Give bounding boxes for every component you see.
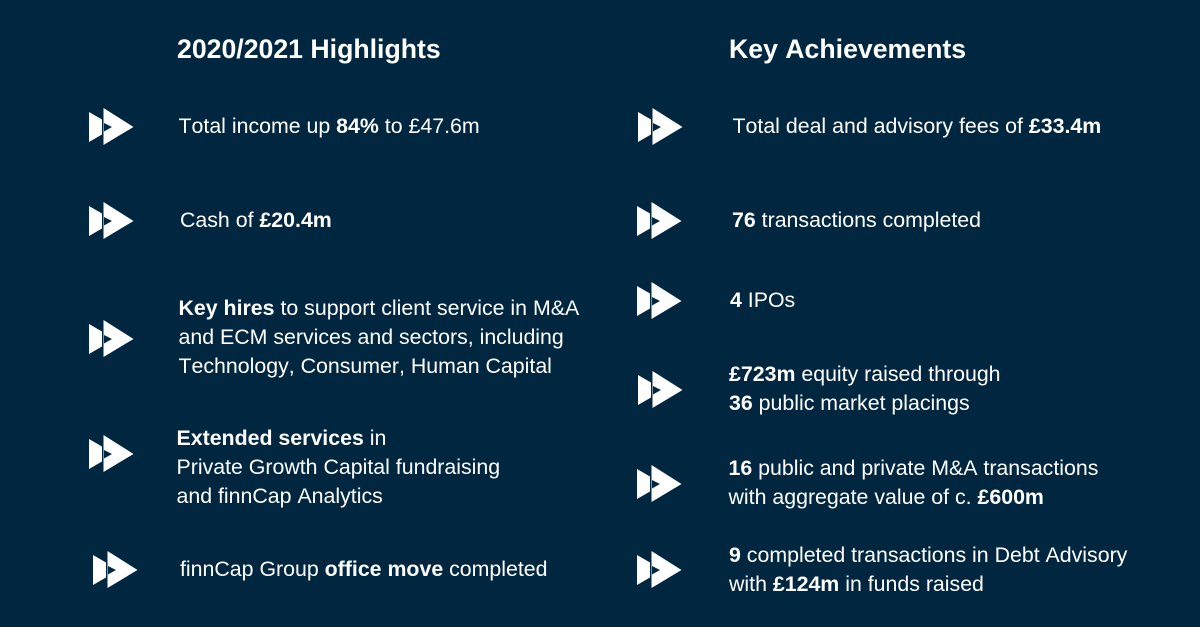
text: debt advisory: 9 completed transactions in Debt Advisory — [729, 543, 1127, 567]
text: key hires: and ECM services and sectors, including — [178, 325, 564, 349]
text: debt advisory: with £124m in funds raised — [729, 572, 984, 596]
icon: arrow 6 right — [637, 551, 682, 588]
text: debt advisory — [729, 543, 1128, 596]
text: total income: Total income up 84% to £47.6m — [178, 114, 480, 138]
heading: 2020/2021 Highlights: 2020/2021 Highlights — [177, 34, 441, 64]
text: extended services: Private Growth Capital fundraising — [176, 455, 500, 479]
icon: arrow 5 left — [93, 551, 138, 588]
text: extended services: and finnCap Analytics — [176, 484, 383, 508]
text: office move: finnCap Group office move completed — [180, 557, 548, 581]
heading: Key Achievements: Key Achievements — [729, 34, 966, 64]
icon: arrow 3 right — [637, 282, 682, 319]
icon: arrow 1 left — [89, 108, 134, 145]
text: M&A — [728, 456, 1098, 509]
text: key hires — [178, 296, 580, 378]
icon: arrow 2 right — [637, 202, 682, 239]
icon: arrow 4 left — [89, 435, 134, 472]
text: key hires: Key hires to support client service in M&A — [178, 296, 579, 320]
text: IPOs: 4 IPOs — [730, 288, 795, 312]
text: equity raised — [729, 362, 1001, 415]
icon: arrow 4 right — [638, 371, 682, 408]
text: M&A: with aggregate value of c. £600m — [728, 485, 1044, 509]
text: M&A: 16 public and private M&A transactions — [728, 456, 1098, 480]
icon: arrow 1 right — [638, 108, 682, 145]
icon: arrow 2 left — [89, 202, 134, 239]
text: extended services — [176, 426, 500, 508]
text: transactions: 76 transactions completed — [732, 208, 981, 232]
text: equity raised: £723m equity raised through — [729, 362, 1001, 386]
text: fees: Total deal and advisory fees of £33.4m — [732, 114, 1101, 138]
text: cash: Cash of £20.4m — [180, 208, 332, 232]
text: key hires: Technology, Consumer, Human Capital — [178, 354, 552, 378]
icon: arrow 5 right — [637, 465, 682, 502]
text: equity raised: 36 public market placings — [729, 391, 970, 415]
text: extended services: Extended services in — [176, 426, 386, 450]
icon: arrow 3 left — [89, 320, 134, 357]
